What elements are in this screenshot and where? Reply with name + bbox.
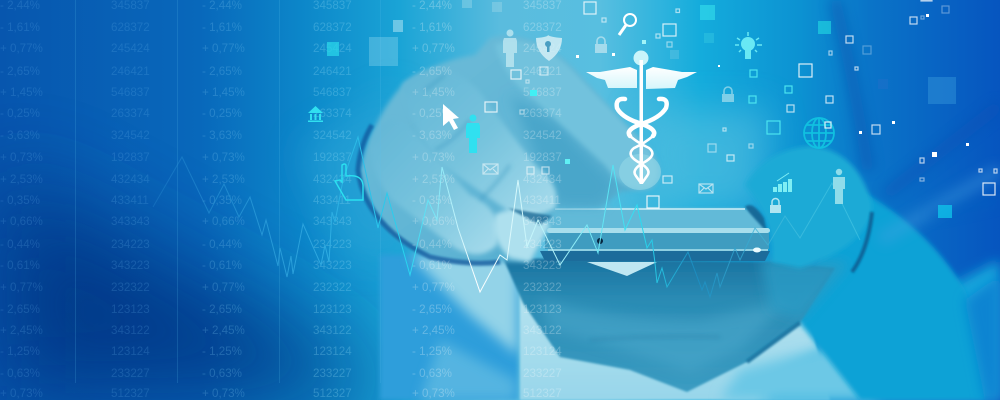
- percentage column 3: [412, 0, 455, 400]
- icon: padlock mid: [722, 87, 734, 102]
- percentage column 1: - 0,44%: [0, 238, 40, 251]
- percentage column 2: + 2,45%: [202, 324, 245, 337]
- number column 2: 263374: [313, 107, 352, 120]
- number column 1: 192837: [111, 151, 150, 164]
- index finger: [495, 41, 658, 189]
- icon: person right: [833, 169, 845, 204]
- percentage column 2: [202, 0, 245, 400]
- number column 1: 324542: [111, 129, 150, 142]
- percentage column 2: - 0,61%: [202, 259, 242, 272]
- thumb of lower hand: [745, 146, 872, 268]
- number column 2: 232322: [313, 281, 352, 294]
- number column 3: 192837: [523, 151, 562, 164]
- percentage column 3: + 0,77%: [412, 281, 455, 294]
- percentage column 2: + 0,66%: [202, 215, 245, 228]
- percentage column 2: - 0,35%: [202, 194, 242, 207]
- number column 2: 546837: [313, 86, 352, 99]
- left wing: [586, 67, 637, 88]
- percentage column 2: - 0,63%: [202, 367, 242, 380]
- percentage column 3: + 1,45%: [412, 86, 455, 99]
- number column 2: 246421: [313, 65, 352, 78]
- percentage column 2: - 1,25%: [202, 345, 242, 358]
- number column 2: 233227: [313, 367, 352, 380]
- serpents upper: [617, 99, 667, 136]
- number column 2: 343343: [313, 215, 352, 228]
- floating squares: [485, 0, 997, 208]
- percentage column 2: - 2,65%: [202, 303, 242, 316]
- percentage column 3: - 3,63%: [412, 129, 452, 142]
- percentage column 2: + 0,77%: [202, 42, 245, 55]
- icon: envelope right: [699, 184, 713, 193]
- middle finger: [402, 70, 556, 215]
- right wing: [646, 67, 697, 89]
- right background folds: [835, 0, 868, 170]
- percentage column 1: + 2,45%: [0, 324, 43, 337]
- vertical grid lines: [76, 0, 380, 383]
- number column 2: 123123: [313, 303, 352, 316]
- icon: globe: [804, 118, 834, 148]
- shadow near fingertip: [508, 208, 552, 225]
- percentage column 3: + 0,77%: [412, 42, 455, 55]
- percentage column 3: - 2,65%: [412, 65, 452, 78]
- number column 2: 343223: [313, 259, 352, 272]
- percentage column 3: - 1,25%: [412, 345, 452, 358]
- icon: padlock top: [595, 37, 607, 53]
- number column 2: 123124: [313, 345, 352, 358]
- blurred shirt background: [300, 0, 1000, 400]
- number column 3: 123123: [523, 303, 562, 316]
- number column 2: 512327: [313, 387, 352, 400]
- lower hand holding the phone: [503, 146, 872, 392]
- percentage column 3: + 0,66%: [412, 215, 455, 228]
- icon: hand pointer: [335, 164, 363, 200]
- percentage column 3: + 2,45%: [412, 324, 455, 337]
- icon: light bulb: [735, 32, 762, 59]
- sleeve edge: [852, 212, 872, 272]
- number column 3: 343223: [523, 259, 562, 272]
- icon: magnifier: [619, 14, 636, 35]
- percentage column 1: - 3,63%: [0, 129, 40, 142]
- number column 3: 628372: [523, 21, 562, 34]
- number column 2: 433411: [313, 194, 351, 207]
- percentage column 2: + 0,73%: [202, 387, 245, 400]
- icon: bank: [308, 106, 323, 122]
- filled squares and dots: [327, 0, 969, 218]
- percentage column 1: + 0,66%: [0, 215, 43, 228]
- staff and orb: [634, 50, 648, 66]
- number column 3: 246421: [523, 65, 562, 78]
- percentage column 3: - 0,35%: [412, 194, 452, 207]
- icon: shield: [536, 35, 562, 61]
- percentage column 1: - 1,61%: [0, 21, 40, 34]
- right sleeve: [790, 190, 985, 400]
- percentage column 2: - 1,61%: [202, 21, 242, 34]
- serpents lower: [630, 136, 653, 183]
- number column 3: 512327: [523, 387, 562, 400]
- percentage column 1: - 0,63%: [0, 367, 40, 380]
- number column 2: 192837: [313, 151, 352, 164]
- percentage column 3: + 0,73%: [412, 151, 455, 164]
- percentage column 2: - 0,25%: [202, 107, 242, 120]
- percentage column 1: - 0,61%: [0, 259, 40, 272]
- number column 3: 324542: [523, 129, 562, 142]
- percentage column 3: - 0,61%: [412, 259, 452, 272]
- hand outer shadow: [358, 125, 500, 263]
- number column 2: 234223: [313, 238, 352, 251]
- number column 1: 246421: [111, 65, 150, 78]
- percentage column 1: - 0,25%: [0, 107, 40, 120]
- number column 3: 245424: [523, 42, 562, 55]
- caduceus medical symbol: [586, 50, 697, 184]
- number column 1: 232322: [111, 281, 150, 294]
- number column 1: 546837: [111, 86, 150, 99]
- icon: padlock near thumb: [770, 198, 781, 213]
- number column 2: 343122: [313, 324, 352, 337]
- percentage column 3: - 0,25%: [412, 107, 452, 120]
- percentage column 3: - 0,44%: [412, 238, 452, 251]
- left shirt panel: [380, 255, 518, 400]
- number column 2: 432434: [313, 173, 352, 186]
- number column 1: 245424: [111, 42, 150, 55]
- number column 1: 123124: [111, 345, 150, 358]
- icon: person pale top: [503, 30, 517, 67]
- number column 3: 232322: [523, 281, 562, 294]
- number column 3: 234223: [523, 238, 562, 251]
- number column 1: 234223: [111, 238, 150, 251]
- number column 1: 432434: [111, 173, 150, 186]
- fingernail: [619, 154, 661, 190]
- percentage column 1: + 0,73%: [0, 387, 43, 400]
- number column 1: 263374: [111, 107, 150, 120]
- back of hand: [360, 36, 659, 263]
- number column 3: 433411: [523, 194, 561, 207]
- number column 2: 245424: [313, 42, 352, 55]
- upper hand fingers: [358, 36, 661, 263]
- percentage column 1: - 1,25%: [0, 345, 40, 358]
- number column 1: 512327: [111, 387, 150, 400]
- percentage column 1: - 0,35%: [0, 194, 40, 207]
- percentage column 2: - 0,44%: [202, 238, 242, 251]
- number column 3: 263374: [523, 107, 562, 120]
- percentage column 3: - 1,61%: [412, 21, 452, 34]
- number column 2: 324542: [313, 129, 352, 142]
- number column 3: 123124: [523, 345, 562, 358]
- percentage column 3: + 2,53%: [412, 173, 455, 186]
- number column 1: 123123: [111, 303, 150, 316]
- percentage column 1: - 2,65%: [0, 303, 40, 316]
- number column 2: [313, 0, 352, 400]
- icon: bar chart: [773, 173, 792, 192]
- percentage column 1: + 1,45%: [0, 86, 43, 99]
- number column 1: 628372: [111, 21, 150, 34]
- number column 1: 343223: [111, 259, 150, 272]
- line chart: [153, 137, 860, 297]
- percentage column 2: + 2,53%: [202, 173, 245, 186]
- number column 3: [523, 0, 562, 400]
- number column 3: 233227: [523, 367, 562, 380]
- icon: person cyan: [466, 114, 480, 153]
- percentage column 3: - 0,63%: [412, 367, 452, 380]
- percentage column 2: + 0,77%: [202, 281, 245, 294]
- percentage column 2: + 0,73%: [202, 151, 245, 164]
- percentage column 2: - 2,65%: [202, 65, 242, 78]
- percentage column 1: [0, 0, 43, 400]
- shaded area between fingers: [510, 95, 615, 205]
- percentage column 1: + 0,73%: [0, 151, 43, 164]
- number column 1: 233227: [111, 367, 150, 380]
- number column 1: 343343: [111, 215, 150, 228]
- percentage column 2: + 1,45%: [202, 86, 245, 99]
- percentage column 3: + 0,73%: [412, 387, 455, 400]
- percentage column 1: + 0,77%: [0, 42, 43, 55]
- phone: [540, 208, 770, 276]
- number column 1: [111, 0, 150, 400]
- thumb: [494, 209, 550, 262]
- number column 3: 432434: [523, 173, 562, 186]
- number column 3: 343343: [523, 215, 562, 228]
- number column 1: 433411: [111, 194, 149, 207]
- icon: envelope left: [483, 164, 498, 174]
- number column 2: 628372: [313, 21, 352, 34]
- number column 3: 343122: [523, 324, 562, 337]
- percentage column 3: - 2,65%: [412, 303, 452, 316]
- percentage column 1: - 2,65%: [0, 65, 40, 78]
- percentage column 2: - 3,63%: [202, 129, 242, 142]
- right pale shirt panel: [520, 280, 830, 400]
- number column 1: 343122: [111, 324, 150, 337]
- percentage column 1: + 2,53%: [0, 173, 43, 186]
- ring finger: [371, 120, 498, 254]
- finger creases: [425, 75, 510, 200]
- icon: mouse cursor: [443, 104, 459, 130]
- percentage column 1: + 0,77%: [0, 281, 43, 294]
- number column 3: 546837: [523, 86, 562, 99]
